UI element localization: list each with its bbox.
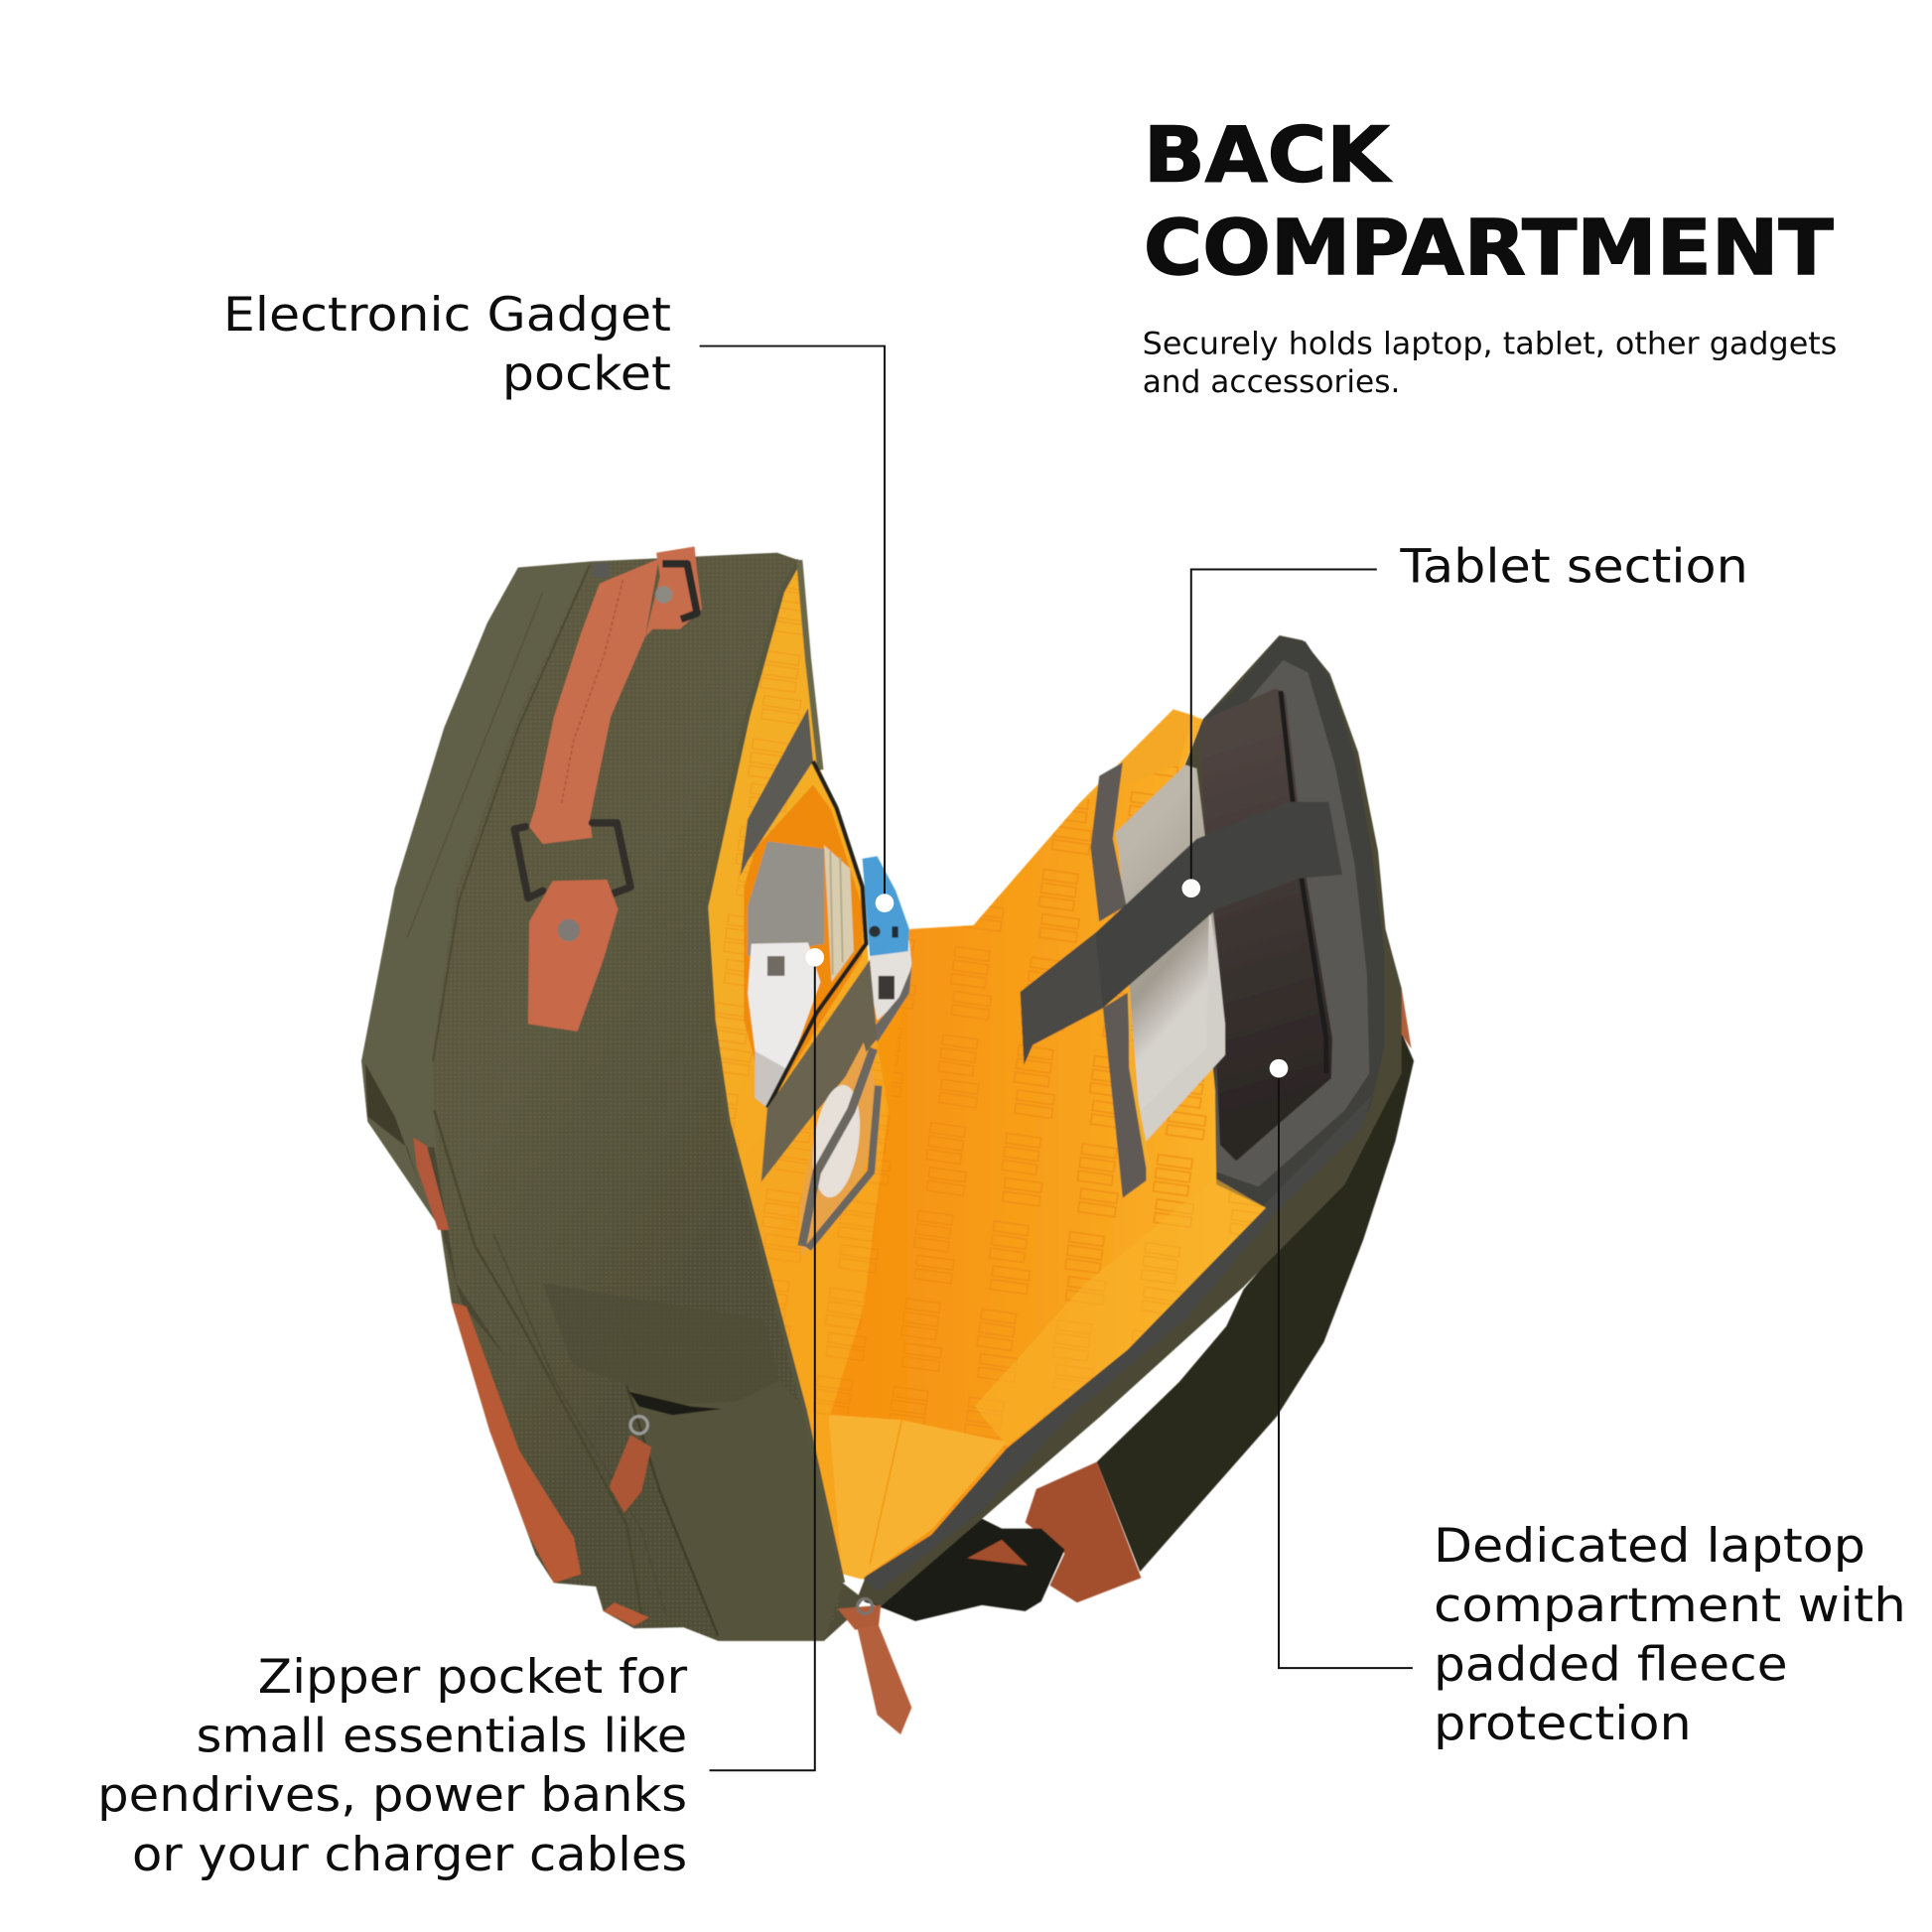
title: COMPARTMENT bbox=[1144, 204, 1834, 293]
yellow inner lining bbox=[814, 710, 1266, 1580]
label: zipper pocket: or your charger cables bbox=[132, 1828, 687, 1882]
leader: tablet section bbox=[1181, 569, 1377, 897]
bottom zip pull bbox=[838, 1598, 911, 1734]
side pocket zip pull bbox=[610, 1417, 651, 1512]
lower mesh pocket bbox=[761, 960, 879, 1256]
title bbox=[1144, 111, 1834, 293]
top handle bbox=[529, 546, 702, 844]
label: zipper pocket: small essentials like bbox=[197, 1710, 687, 1764]
leather tab with rivet bbox=[528, 880, 619, 1032]
label: electronic gadget pocket bbox=[223, 288, 671, 402]
label: electronic gadget pocket: Electronic Gadget bbox=[223, 288, 671, 343]
subtitle: Securely holds laptop, tablet, other gadgets bbox=[1143, 327, 1837, 362]
lower folds bbox=[420, 1148, 505, 1357]
lower pocket strap bbox=[1103, 992, 1150, 1198]
upper pocket strap bbox=[1091, 762, 1127, 921]
label: electronic gadget pocket: pocket bbox=[502, 347, 671, 402]
power bank bbox=[863, 856, 911, 1042]
side gusset bbox=[361, 563, 590, 1229]
lower lining pocket bbox=[802, 1413, 1007, 1580]
metal buckle bbox=[514, 823, 630, 898]
label: zipper pocket bbox=[97, 1650, 688, 1882]
subtitle: and accessories. bbox=[1143, 364, 1400, 400]
label: laptop compartment: protection bbox=[1434, 1697, 1692, 1751]
yellow flap of the front compartment bbox=[706, 560, 889, 1583]
label: zipper pocket: Zipper pocket for bbox=[258, 1650, 688, 1705]
leader: laptop compartment bbox=[1270, 1059, 1413, 1668]
orange backing between the flaps bbox=[802, 929, 987, 1580]
fleece padded lining bbox=[861, 636, 1384, 1591]
label: tablet section: Tablet section bbox=[1399, 540, 1748, 595]
label: laptop compartment: compartment with bbox=[1434, 1579, 1906, 1633]
label: laptop compartment: padded fleece bbox=[1434, 1637, 1788, 1692]
leather trims bbox=[413, 1138, 649, 1626]
illustration: open backpack bbox=[361, 546, 1414, 1734]
leader: zipper pocket bbox=[710, 948, 824, 1770]
back panel shell bbox=[858, 635, 1402, 1606]
label: laptop compartment: Dedicated laptop bbox=[1434, 1519, 1865, 1574]
label: zipper pocket: pendrives, power banks bbox=[97, 1768, 687, 1823]
title: BACK bbox=[1144, 111, 1393, 201]
zipper pocket contents bbox=[741, 708, 866, 1108]
leader: electronic gadget pocket bbox=[700, 346, 894, 912]
silver tablet bbox=[1115, 764, 1225, 1141]
elastic band bbox=[1021, 802, 1342, 1064]
label: laptop compartment bbox=[1434, 1519, 1906, 1751]
subtitle bbox=[1143, 327, 1837, 400]
back shoulder strap bbox=[864, 956, 1414, 1621]
front body of the bag bbox=[361, 553, 864, 1641]
laptop bbox=[1199, 688, 1332, 1161]
